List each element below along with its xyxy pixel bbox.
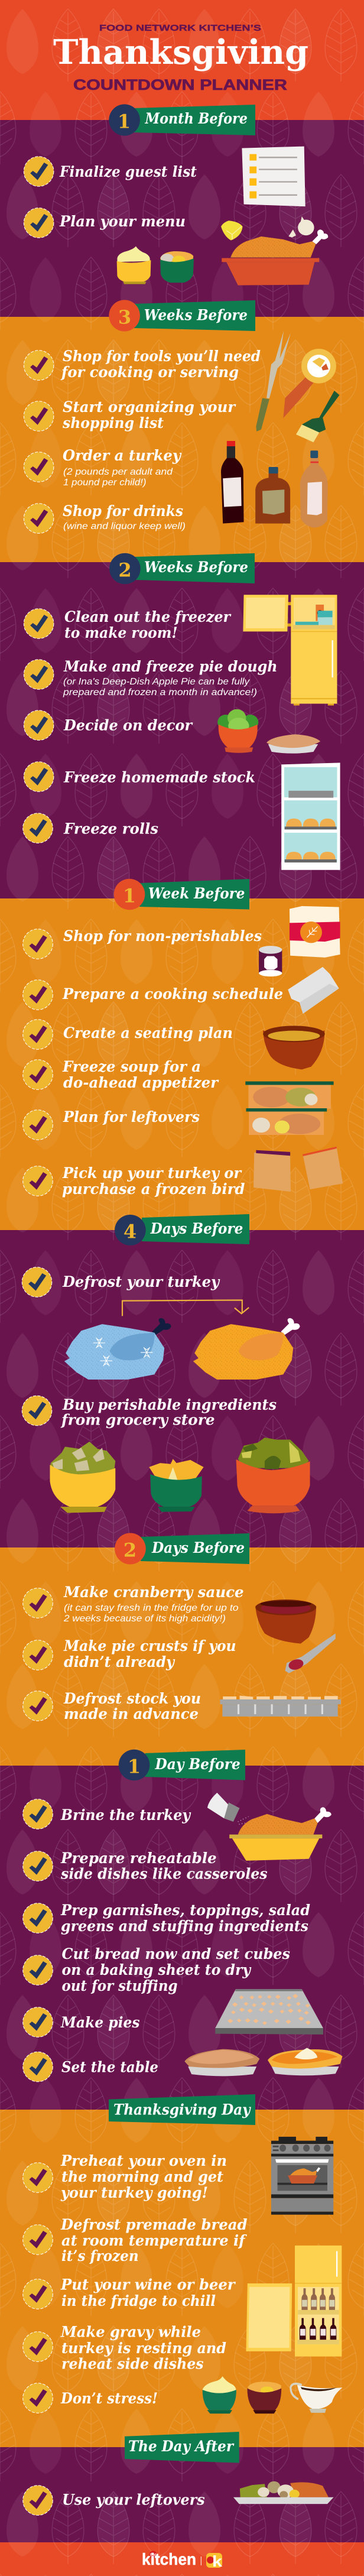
- icon: whiskey bottle: [255, 467, 290, 524]
- task: preheat your oven: Preheat your oven in: [60, 2152, 227, 2169]
- panel: the day after: [0, 2432, 364, 2542]
- task: shop for drinks: (wine and liquor keep well): [63, 521, 186, 531]
- panel: 1 month before: [0, 104, 364, 317]
- icon: thawed turkey: [193, 1318, 300, 1380]
- banner: 4 Days Before: Days Before: [150, 1220, 243, 1237]
- icon: foil roll: [288, 967, 339, 1014]
- icon: spoon with cranberry: [285, 1633, 336, 1673]
- task: preheat your oven: [23, 2152, 227, 2201]
- logo: Food Network Kitchen: k: [212, 2552, 223, 2570]
- task: freeze rolls: [23, 813, 158, 843]
- icon: brined turkey in yellow pan: [229, 1807, 332, 1861]
- icon: checklist: [242, 147, 306, 206]
- icon: frozen turkey: [64, 1318, 171, 1380]
- task: don't stress: [23, 2383, 158, 2413]
- banner: 3 Weeks Before: Weeks Before: [144, 307, 248, 324]
- task: make pies: Make pies: [60, 2014, 139, 2031]
- task: order a turkey: (2 pounds per adult and: [63, 467, 173, 477]
- task: shop for drinks: Shop for drinks: [63, 502, 183, 520]
- banner: 1 Week Before: Week Before: [148, 885, 245, 902]
- banner: 1 Month Before: Month Before: [145, 110, 248, 127]
- banner: 1 Week Before: 1: [123, 884, 136, 907]
- task: freeze soup: [23, 1058, 219, 1091]
- icon: yellow bowl of greens: [50, 1442, 115, 1513]
- task: decide on decor: Decide on decor: [63, 717, 193, 734]
- task: make pies: [23, 2007, 140, 2037]
- task: shop for non-perishables: [23, 927, 262, 959]
- panel: 3 weeks before: [0, 300, 364, 562]
- task: make cranberry sauce: Make cranberry sauce: [63, 1584, 244, 1601]
- task: make pie crusts: didn’t already: [64, 1653, 175, 1670]
- panel: header: [0, 0, 364, 120]
- icon: leftovers platter: [233, 2481, 334, 2504]
- task: make and freeze pie dough: (or Ina's Deep-Dish Apple Pie can be fully: [63, 677, 250, 687]
- logo: Food Network Kitchen: food: [150, 2554, 156, 2557]
- banner: 1 Week Before: [114, 879, 249, 910]
- task: brine the turkey: [23, 1799, 191, 1829]
- task: freeze homemade stock: [24, 762, 255, 791]
- task: plan your menu: [24, 208, 186, 238]
- task: clean out the freezer: to make room!: [64, 624, 178, 641]
- panel: 1 week before: [0, 879, 364, 1230]
- banner: 1 Day Before: 1: [128, 1756, 141, 1778]
- task: order a turkey: [24, 447, 181, 488]
- task: defrost stock: Defrost stock you: [63, 1690, 201, 1707]
- icon: pie: [266, 734, 320, 754]
- icon: cranberry bowl: [255, 1600, 316, 1644]
- task: cut bread: out for stuffing: [61, 1977, 177, 1994]
- task: shop for tools: [24, 348, 261, 381]
- task: order a turkey: 1 pound per child!): [63, 478, 147, 488]
- icon: soup bowl: [263, 1026, 325, 1069]
- task: defrost stock: [23, 1690, 201, 1722]
- icon: tan liquor bottle: [300, 450, 328, 528]
- banner: 2 Days Before: Days Before: [151, 1539, 245, 1556]
- task: plan for leftovers: Plan for leftovers: [63, 1108, 200, 1125]
- task: start organizing: Start organizing your: [63, 398, 236, 416]
- icon: dark red bowl of vegetables: [247, 2382, 281, 2413]
- panel: 2 days before: [0, 1533, 364, 1766]
- task: shop for tools: for cooking or serving: [60, 364, 239, 381]
- banner: 2 Weeks Before: Weeks Before: [144, 559, 248, 576]
- task: make gravy: reheat side dishes: [61, 2356, 204, 2373]
- icon: mashed potatoes bowl: [117, 246, 151, 284]
- panel: 2 weeks before: [0, 553, 364, 898]
- task: prepare a cooking schedule: [23, 980, 283, 1010]
- icon: salt shaker: [207, 1793, 252, 1824]
- task: clean out the freezer: Clean out the freezer: [64, 608, 232, 625]
- banner: The Day After: The Day After: [128, 2438, 235, 2455]
- icon: open freezer with rolls: [281, 763, 340, 870]
- task: shop for tools: Shop for tools you’ll need: [63, 348, 261, 365]
- task: buy perishable ingredients: [22, 1396, 277, 1429]
- logo: Food Network Kitchen: [142, 2550, 223, 2570]
- icon: ice cube tray of stock: [220, 1696, 341, 1717]
- task: buy perishable ingredients: Buy perishable ingredients: [62, 1396, 277, 1413]
- task: pick up your turkey: Pick up your turkey or: [62, 1164, 242, 1182]
- icon: oven with turkey: [271, 2137, 333, 2215]
- task: preheat your oven: your turkey going!: [60, 2184, 208, 2201]
- task: create a seating plan: [23, 1020, 233, 1049]
- panel: Thanksgiving Day: [0, 2094, 364, 2447]
- task: make pie crusts: [23, 1637, 236, 1670]
- task: don't stress: Don’t stress!: [60, 2390, 158, 2407]
- banner: 4 Days Before: 4: [124, 1220, 136, 1242]
- task: pick up your turkey: [23, 1164, 245, 1198]
- task: brine the turkey: Brine the turkey: [60, 1806, 191, 1824]
- task: defrost stock: made in advance: [64, 1705, 199, 1722]
- task: shop for non-perishables: Shop for non-perishables: [63, 927, 262, 945]
- task: prepare reheatable side dishes: [23, 1850, 268, 1883]
- icon: wine bottle: [221, 441, 244, 524]
- task: buy perishable ingredients: from grocery store: [60, 1412, 215, 1429]
- banner: 3 Weeks Before: 3: [118, 306, 131, 329]
- banner: 2 Days Before: [115, 1533, 249, 1564]
- icon: zip bags: [254, 1147, 343, 1192]
- task: defrost premade bread: it’s frozen: [61, 2247, 139, 2264]
- task: cut bread: on a baking sheet to dry: [61, 1961, 251, 1978]
- icon: green bowl of squash: [149, 1459, 204, 1512]
- icon: open fridge: [243, 595, 337, 705]
- task: make and freeze pie dough: [24, 658, 278, 697]
- task: use your leftovers: [23, 2486, 205, 2515]
- task: defrost premade bread: at room temperature if: [61, 2232, 248, 2249]
- task: prep garnishes: Prep garnishes, toppings, salad: [60, 1902, 310, 1919]
- task: freeze homemade stock: Freeze homemade stock: [63, 769, 255, 786]
- task: use your leftovers: Use your leftovers: [62, 2491, 205, 2509]
- task: make cranberry sauce: (it can stay fresh in the fridge for up to: [64, 1603, 239, 1613]
- task: put your wine or beer: Put your wine or beer: [60, 2276, 236, 2293]
- task: defrost premade bread: [23, 2216, 248, 2264]
- task: plan your menu: Plan your menu: [59, 213, 186, 230]
- task: defrost premade bread: Defrost premade bread: [60, 2216, 247, 2233]
- icon: basting brush: [296, 391, 339, 442]
- banner: 2 Weeks Before: [109, 553, 255, 584]
- arrow: frozen to thawed: [122, 1300, 249, 1316]
- icon: gravy boat: [291, 2384, 343, 2413]
- task: finalize guest list: [24, 157, 197, 186]
- task: put your wine or beer: in the fridge to chill: [61, 2292, 216, 2309]
- task: prep garnishes: greens and stuffing ingredients: [61, 1918, 308, 1935]
- task: defrost your turkey: [22, 1267, 220, 1297]
- icon: bowl of apples: [217, 709, 258, 753]
- panel: footer: [0, 2542, 364, 2576]
- panel: 1 day before: [0, 1750, 364, 2110]
- task: make and freeze pie dough: prepared and frozen a month in advance!): [63, 687, 257, 697]
- task: make cranberry sauce: [23, 1584, 244, 1624]
- icon: meat thermometer: [283, 349, 336, 418]
- banner: 3 Weeks Before: [109, 300, 255, 332]
- icon: green bowl of mashed potatoes: [203, 2376, 236, 2413]
- banner: 2 Weeks Before: 2: [118, 559, 132, 582]
- task: make cranberry sauce: 2 weeks because of its high acidity!): [63, 1614, 226, 1624]
- icon: turkey in roasting pan: [221, 216, 328, 285]
- task: freeze rolls: Freeze rolls: [63, 820, 158, 838]
- task: set the table: Set the table: [61, 2059, 158, 2076]
- task: finalize guest list: Finalize guest list: [59, 163, 197, 180]
- subtitle: COUNTDOWN PLANNER: [73, 77, 287, 93]
- icon: carving fork: [256, 330, 291, 432]
- task: freeze soup: Freeze soup for a: [62, 1058, 201, 1075]
- icon: apple pie: [184, 2049, 259, 2076]
- task: decide on decor: [24, 710, 193, 740]
- banner: Thanksgiving Day: Thanksgiving Day: [113, 2101, 251, 2118]
- banner: 1 Day Before: Day Before: [155, 1756, 240, 1773]
- task: make gravy: turkey is resting and: [61, 2340, 226, 2357]
- icon: fridge with wine and beer: [246, 2246, 342, 2357]
- title: Thanksgiving: [53, 33, 308, 72]
- task: make gravy: Make gravy while: [60, 2324, 201, 2341]
- task: prep garnishes: [23, 1902, 310, 1935]
- task: put your wine or beer: [23, 2276, 236, 2309]
- banner: 1 Day Before: [119, 1750, 245, 1780]
- icon: baking sheet with bread cubes: [215, 1989, 323, 2035]
- task: defrost your turkey: Defrost your turkey: [62, 1273, 220, 1290]
- logo: Food Network Kitchen: kitchen: [142, 2550, 196, 2568]
- task: make pie crusts: Make pie crusts if you: [63, 1637, 236, 1654]
- task: cut bread: [23, 1945, 290, 1994]
- banner: 4 Days Before: [115, 1214, 249, 1245]
- banner: 1 Month Before: [109, 104, 255, 136]
- task: cut bread: Cut bread now and set cubes: [61, 1945, 290, 1962]
- task: order a turkey: Order a turkey: [63, 447, 181, 464]
- icon: leftover containers: [245, 1081, 334, 1135]
- task: start organizing: [24, 398, 236, 432]
- banner: The Day After: [125, 2432, 239, 2463]
- task: prepare reheatable side dishes: side dishes like casseroles: [60, 1866, 268, 1883]
- task: shop for drinks: [24, 502, 186, 533]
- task: clean out the freezer: [24, 608, 232, 641]
- task: pick up your turkey: purchase a frozen bird: [62, 1180, 245, 1198]
- task: start organizing: shopping list: [62, 414, 164, 432]
- task: prepare a cooking schedule: Prepare a cooking schedule: [62, 985, 283, 1003]
- task: preheat your oven: the morning and get: [61, 2168, 223, 2185]
- task: make and freeze pie dough: Make and freeze pie dough: [63, 658, 278, 675]
- banner: 1 Month Before: 1: [118, 110, 131, 132]
- icon: canned goods: [259, 946, 282, 976]
- task: plan for leftovers: [23, 1108, 200, 1140]
- banner: 2 Days Before: 2: [124, 1539, 136, 1562]
- icon: vegetables bowl: [160, 251, 194, 283]
- task: set the table: [23, 2052, 158, 2082]
- task: make gravy: [23, 2324, 226, 2373]
- task: create a seating plan: Create a seating plan: [63, 1024, 233, 1042]
- banner: Thanksgiving Day: [109, 2094, 255, 2125]
- icon: red bowl of broccoli: [236, 1438, 310, 1513]
- icon: pumpkin pie: [268, 2048, 343, 2075]
- icon: flour bag: [290, 906, 340, 958]
- task: prepare reheatable side dishes: Prepare reheatable: [60, 1850, 217, 1867]
- text: Food Network Kitchen's: FOOD NETWORK KITCHEN’S: [99, 23, 261, 33]
- task: freeze soup: do-ahead appetizer: [63, 1074, 219, 1091]
- panel: 4 days before: [0, 1214, 364, 1547]
